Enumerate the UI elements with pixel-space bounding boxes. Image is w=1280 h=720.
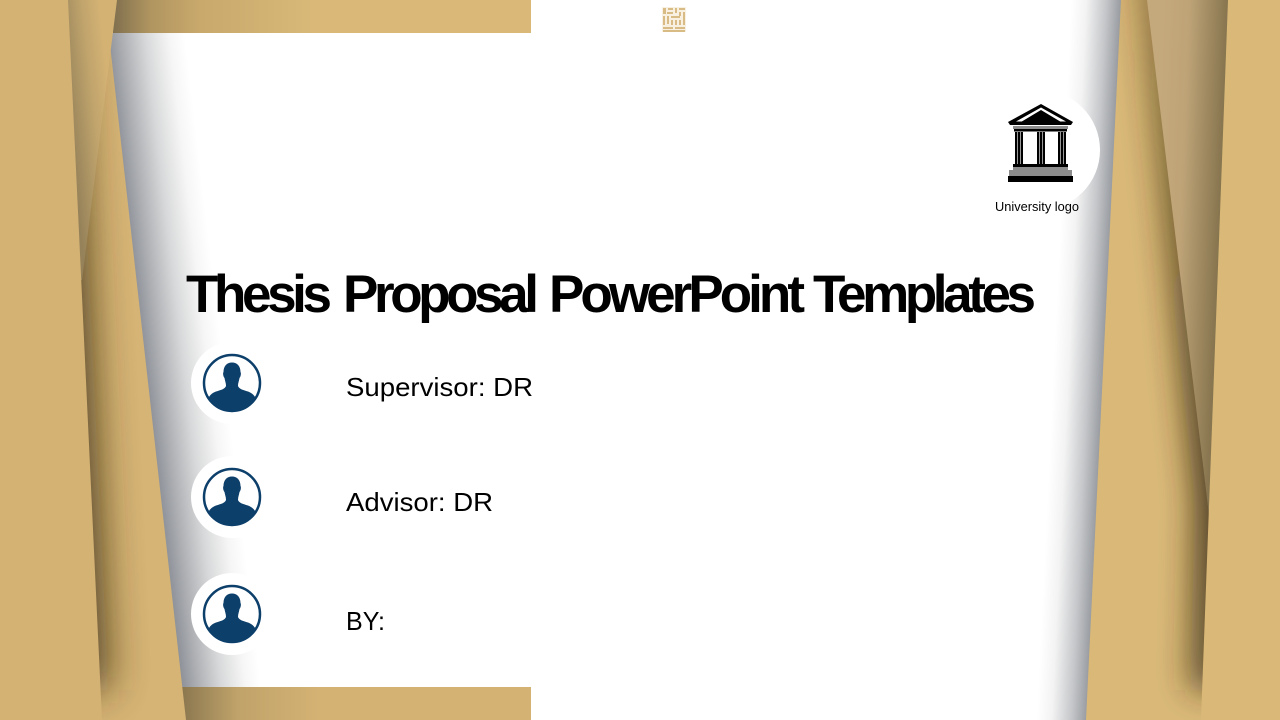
panel: university logo disc xyxy=(980,90,1100,210)
icon: gold calligraphic emblem xyxy=(662,7,686,32)
advisor label: Advisor: DR xyxy=(346,487,493,517)
author label: BY: xyxy=(346,606,385,636)
title: Templates xyxy=(813,265,1036,324)
right middle wedge xyxy=(1147,0,1235,515)
title: Proposal xyxy=(343,265,539,324)
title: Thesis xyxy=(186,265,332,324)
row: author avatar xyxy=(191,573,273,655)
row: advisor avatar xyxy=(191,456,273,538)
icon: university building xyxy=(1008,104,1073,182)
left upper wedge xyxy=(60,0,117,280)
logo caption: University logo xyxy=(995,199,1079,214)
left outer gold panel xyxy=(0,0,102,720)
title xyxy=(186,265,1036,324)
title: PowerPoint xyxy=(549,265,805,324)
top gold strip xyxy=(113,0,531,33)
bottom gold strip xyxy=(180,687,531,720)
right outer gold panel xyxy=(1201,0,1280,720)
supervisor label: Supervisor: DR xyxy=(346,372,533,402)
right inner gold panel with shadow xyxy=(1086,0,1209,720)
left inner gold panel with shadow xyxy=(81,50,186,720)
row: supervisor avatar xyxy=(191,342,273,424)
